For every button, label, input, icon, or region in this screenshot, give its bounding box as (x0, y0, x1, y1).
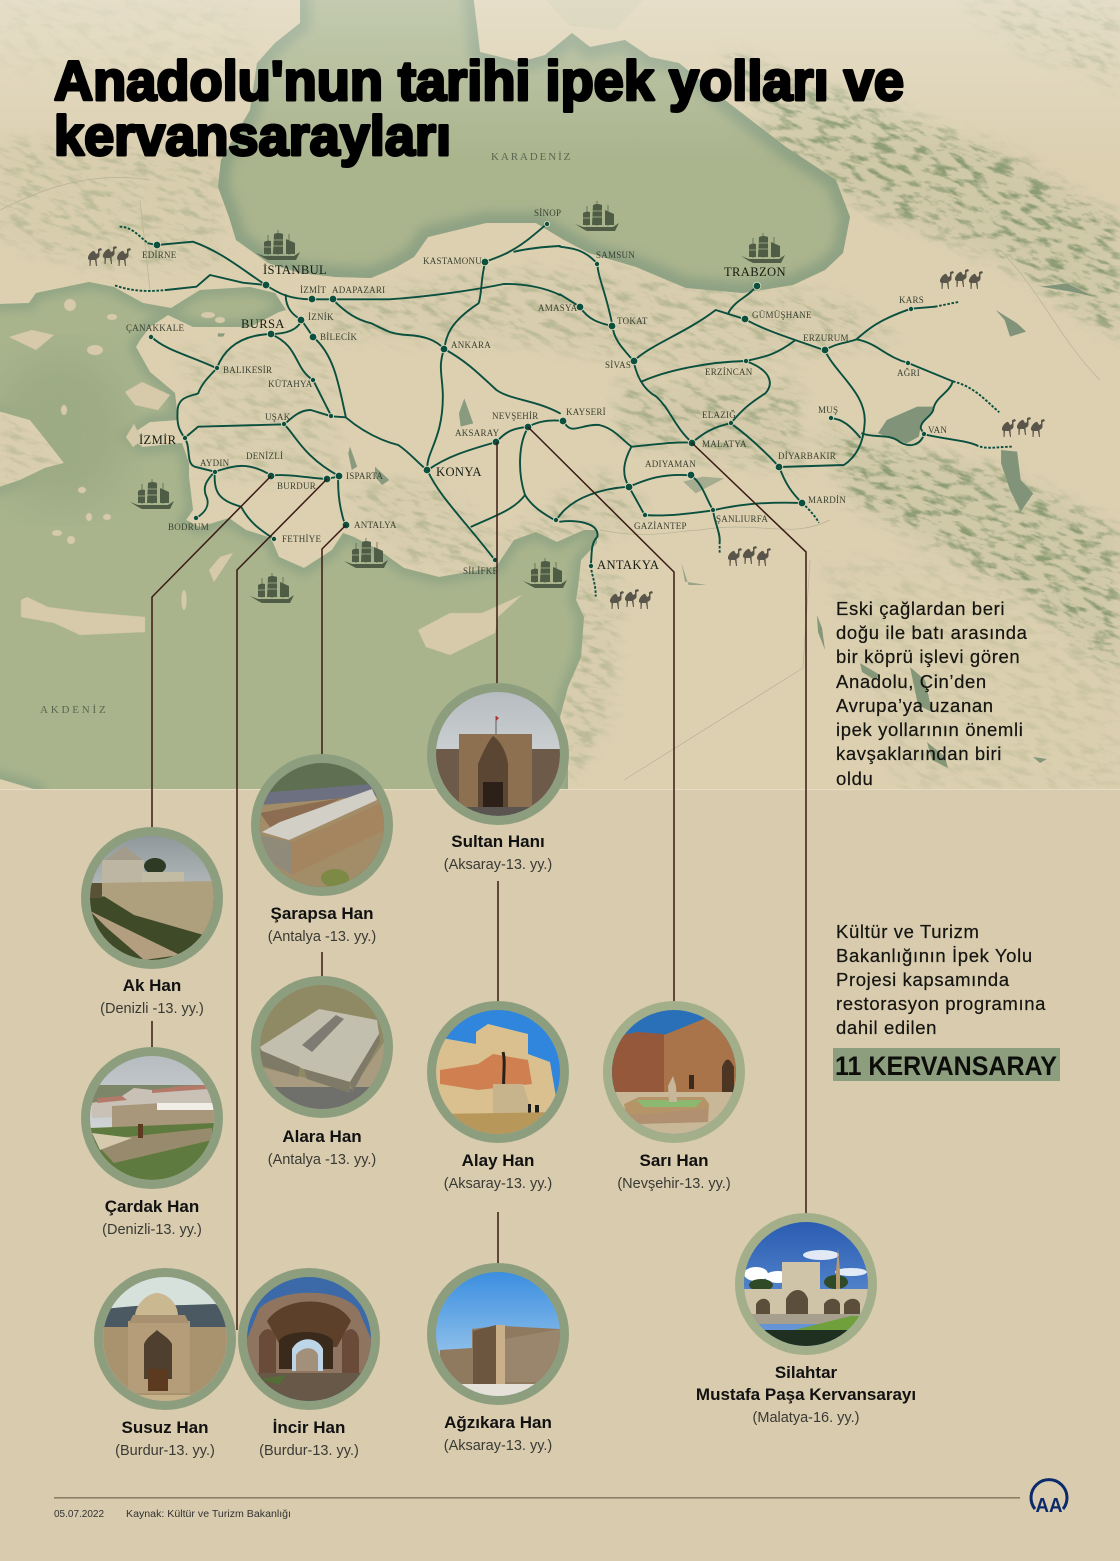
project text: Projesi kapsamında (836, 969, 1010, 990)
city labels: BİLECİK (320, 332, 357, 342)
silk road routes: east (560, 247, 1012, 597)
city labels: DİYARBAKIR (778, 451, 836, 461)
icons: ships (130, 201, 785, 603)
panel: Sultan Hanı (427, 683, 569, 873)
panel: Silahtar Mustafa Paşa Kervansarayı: Mustafa Paşa Kervansarayı (696, 1385, 916, 1404)
city labels: EDİRNE (142, 250, 177, 260)
panel: Çardak Han: Çardak Han (105, 1197, 199, 1216)
city labels: İZNİK (308, 312, 334, 322)
panel: Alay Han: Alay Han (462, 1151, 534, 1170)
panel: Sarı Han: Sarı Han (640, 1151, 708, 1170)
icons: camel caravans (88, 246, 1045, 609)
city labels: ANTALYA (354, 520, 397, 530)
city labels: AKSARAY (455, 428, 500, 438)
panel: Alara Han (251, 976, 393, 1168)
islands (9, 299, 522, 655)
panel: Ak Han (81, 827, 223, 1017)
panel: Sultan Hanı: (Aksaray-13. yy.) (444, 857, 552, 873)
panel: Şarapsa Han: (Antalya -13. yy.) (268, 929, 376, 945)
city labels: KARS (899, 295, 924, 305)
panel: İncir Han: (Burdur-13. yy.) (259, 1443, 359, 1459)
panel: Ağzıkara Han (427, 1263, 569, 1454)
panel: Şarapsa Han (251, 754, 393, 945)
panel: Susuz Han (94, 1268, 236, 1459)
map (0, 0, 1120, 790)
panel: Sarı Han (603, 1001, 745, 1192)
project text: Bakanlığının İpek Yolu (836, 945, 1033, 966)
intro text: oldu (836, 768, 873, 789)
intro text (836, 598, 1028, 789)
city labels: BURSA (241, 317, 285, 331)
city labels: KAYSERİ (566, 407, 606, 417)
panel: Sarı Han: (Nevşehir-13. yy.) (617, 1176, 731, 1192)
city labels: ERZİNCAN (705, 367, 753, 377)
city labels: SAMSUN (596, 250, 635, 260)
silk road routes: west (115, 224, 560, 561)
panel: Silahtar Mustafa Paşa Kervansarayı (696, 1213, 916, 1426)
city labels: TRABZON (724, 265, 786, 279)
city labels: İSTANBUL (263, 263, 327, 277)
city labels: KONYA (436, 465, 482, 479)
city labels: GÜMÜŞHANE (752, 310, 812, 320)
city labels: SİLİFKE (463, 566, 499, 576)
callout: 11 kervansaray: 11 KERVANSARAY (835, 1051, 1057, 1081)
black sea (218, 0, 850, 293)
city markers (148, 221, 927, 569)
project text: Kültür ve Turizm (836, 921, 980, 942)
footer date: 05.07.2022 (54, 1509, 104, 1520)
project text: restorasyon programına (836, 993, 1046, 1014)
city labels: BALIKESİR (223, 365, 272, 375)
project text: dahil edilen (836, 1017, 937, 1038)
city labels: FETHİYE (282, 534, 321, 544)
panel: Silahtar Mustafa Paşa Kervansarayı: Silahtar (775, 1363, 838, 1382)
panel: İncir Han (238, 1268, 380, 1459)
city labels: UŞAK (265, 412, 291, 422)
city labels: ERZURUM (803, 333, 849, 343)
panel: Ak Han: (Denizli -13. yy.) (100, 1001, 204, 1017)
city labels: İZMİT (300, 285, 326, 295)
intro text: Anadolu, Çin’den (836, 671, 987, 692)
city labels: ANKARA (451, 340, 491, 350)
city labels: VAN (928, 425, 947, 435)
panel: Susuz Han: Susuz Han (122, 1418, 208, 1437)
title (54, 49, 904, 167)
panel: Ağzıkara Han: Ağzıkara Han (444, 1413, 552, 1432)
panel: Çardak Han (81, 1047, 223, 1238)
panel: Şarapsa Han: Şarapsa Han (270, 904, 374, 923)
city labels: ISPARTA (346, 471, 383, 481)
city labels: ADIYAMAN (645, 459, 696, 469)
city labels: SİVAS (605, 360, 631, 370)
panel: Alara Han: Alara Han (282, 1127, 362, 1146)
city labels: KÜTAHYA (268, 379, 313, 389)
footer source: Kaynak: Kültür ve Turizm Bakanlığı (126, 1509, 291, 1520)
city labels: ELAZIĞ (702, 410, 736, 420)
title: Anadolu'nun tarihi ipek yolları ve (54, 49, 904, 112)
logo: AA (1031, 1480, 1067, 1517)
city labels: DENİZLİ (246, 451, 283, 461)
sea label: Akdeniz: AKDENİZ (40, 704, 108, 716)
city labels (126, 208, 947, 576)
sea label: Karadeniz: KARADENİZ (491, 151, 572, 163)
city labels: BODRUM (168, 522, 209, 532)
city labels: İZMİR (139, 433, 177, 447)
intro text: Eski çağlardan beri (836, 598, 1005, 619)
city labels: MARDİN (808, 495, 846, 505)
intro text: ipek yollarının önemli (836, 719, 1023, 740)
city labels: AMASYA (538, 303, 578, 313)
panel: Alay Han (427, 1001, 569, 1192)
panel: Sultan Hanı: Sultan Hanı (451, 832, 545, 851)
project text (836, 921, 1046, 1038)
panel: İncir Han: İncir Han (273, 1418, 345, 1437)
panel: Silahtar Mustafa Paşa Kervansarayı: (Malatya-16. yy.) (753, 1410, 859, 1426)
city labels: MALATYA (702, 439, 747, 449)
city labels: ANTAKYA (597, 558, 659, 572)
intro text: Avrupa’ya uzanan (836, 695, 994, 716)
city labels: TOKAT (617, 316, 648, 326)
logo: AA: AA (1036, 1495, 1062, 1517)
city labels: ÇANAKKALE (126, 323, 184, 333)
intro text: kavşaklarından biri (836, 743, 1002, 764)
city labels: NEVŞEHİR (492, 411, 538, 421)
panel: Alay Han: (Aksaray-13. yy.) (444, 1176, 552, 1192)
city labels: BURDUR (277, 481, 316, 491)
city labels: KASTAMONU (423, 256, 482, 266)
city labels: AYDIN (200, 458, 230, 468)
azov sea (546, 0, 643, 30)
panel: Ağzıkara Han: (Aksaray-13. yy.) (444, 1438, 552, 1454)
city labels: SİNOP (534, 208, 561, 218)
panel: Çardak Han: (Denizli-13. yy.) (102, 1222, 202, 1238)
city labels: ADAPAZARI (332, 285, 385, 295)
city labels: ŞANLIURFA (716, 514, 768, 524)
city labels: AĞRI (897, 368, 920, 378)
lakes (681, 283, 1094, 585)
city labels: MUŞ (818, 405, 838, 415)
footer rule (54, 1497, 1020, 1499)
mediterranean and aegean sea (0, 282, 597, 789)
panel: Ak Han: Ak Han (123, 976, 181, 995)
title: kervansarayları (54, 104, 451, 167)
panel: Alara Han: (Antalya -13. yy.) (268, 1152, 376, 1168)
intro text: bir köprü işlevi gören (836, 646, 1020, 667)
panel: Susuz Han: (Burdur-13. yy.) (115, 1443, 215, 1459)
intro text: doğu ile batı arasında (836, 622, 1028, 643)
city labels: GAZİANTEP (634, 521, 687, 531)
leader lines (152, 427, 806, 1330)
